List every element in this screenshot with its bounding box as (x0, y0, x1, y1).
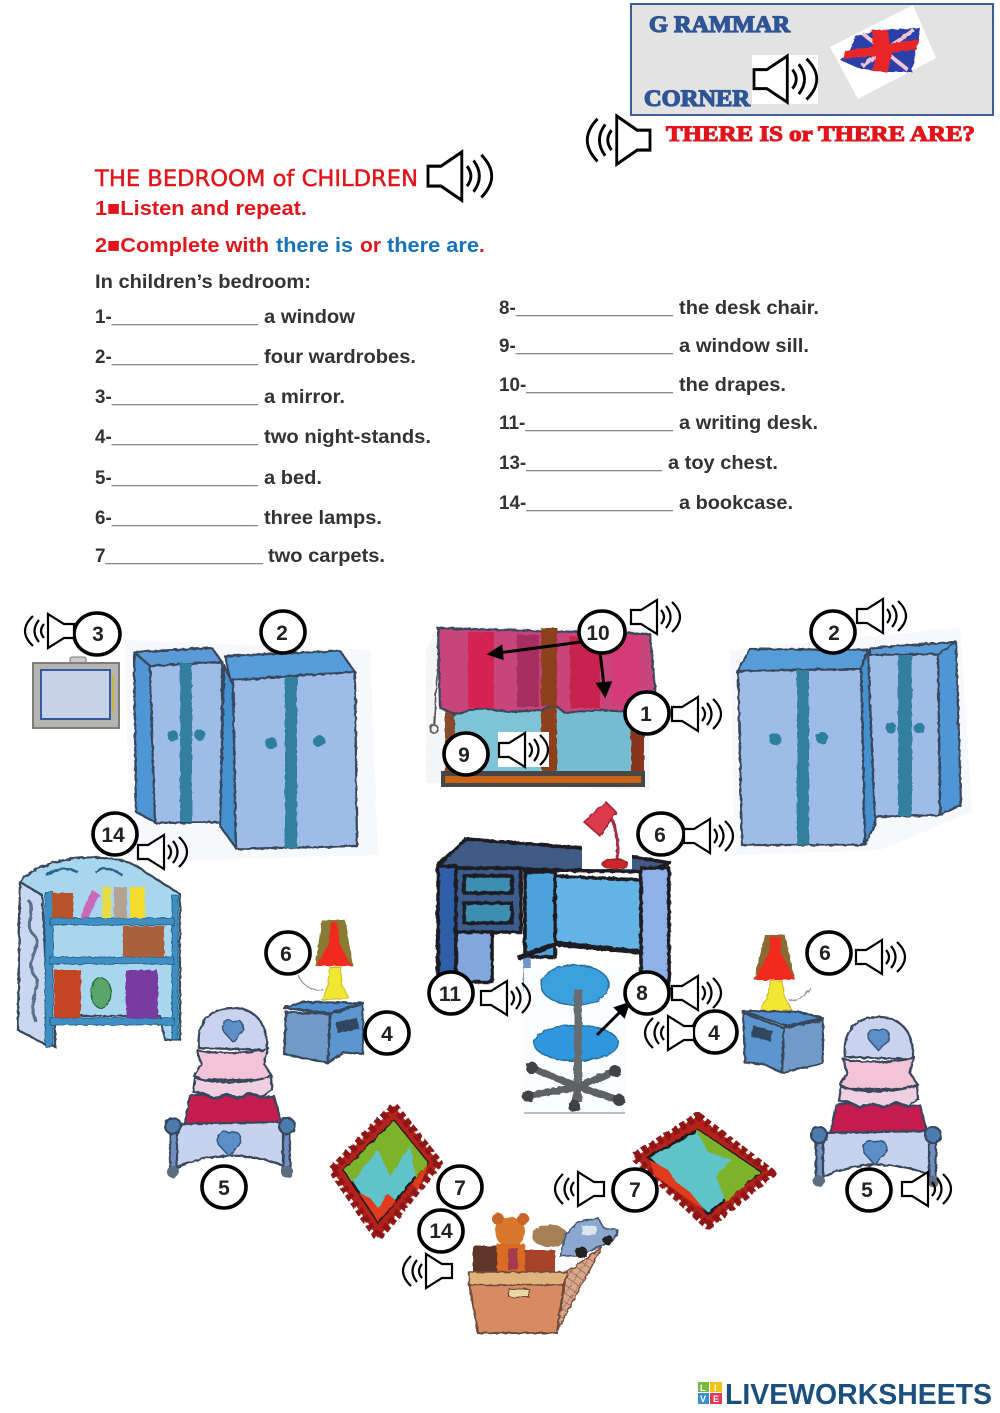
label 6 desk (638, 813, 684, 855)
instruction 2 (95, 234, 485, 257)
logo: liveworksheets: I (714, 1383, 717, 1393)
instruction 2: there is (276, 234, 353, 257)
toy chest (469, 1213, 618, 1333)
instruction 2: . (479, 234, 485, 257)
back panels (525, 872, 555, 957)
wardrobes: left pair (125, 640, 378, 862)
exercise: right column: 9-_______________ (499, 335, 674, 357)
logo: liveworksheets: E (713, 1394, 719, 1404)
exercise: right column: a toy chest. (668, 452, 778, 474)
large wardrobe (738, 649, 875, 845)
exercise: right column: the desk chair. (679, 297, 819, 319)
exercise: left column: 1-______________ (95, 306, 259, 328)
label 10 (579, 611, 625, 653)
wardrobes: right pair (730, 628, 972, 855)
label 14 bookcase: 14 (101, 824, 125, 847)
instruction 2: there are (387, 234, 479, 257)
label 8 (625, 972, 669, 1014)
books (52, 887, 164, 1018)
logo: liveworksheets: L (700, 1383, 706, 1393)
banner: grammar corner (631, 4, 993, 115)
label 2 right (811, 611, 855, 653)
exercise: left column: a window (264, 306, 356, 328)
pull cord (434, 660, 438, 724)
exercise: left column: a mirror. (264, 386, 345, 408)
speaker for 4 (645, 1016, 694, 1050)
right carpet (634, 1116, 772, 1226)
large wardrobe (220, 651, 357, 849)
exercise: left column (95, 306, 431, 567)
small wardrobe (134, 648, 222, 823)
exercise: right column: 13-_____________ (499, 452, 663, 474)
label 7 left (438, 1166, 482, 1208)
title: the bedroom of children: THE BEDROOM of CHILDREN (94, 167, 418, 192)
bookcase (18, 857, 180, 1047)
speaker for 7 (555, 1172, 604, 1206)
label 11 (429, 972, 473, 1014)
label 5 left (202, 1166, 246, 1208)
mirror (33, 657, 119, 728)
label 1 (625, 692, 669, 734)
window with drapes (426, 626, 656, 790)
left carpet (332, 1106, 439, 1238)
label 10: 10 (586, 622, 610, 645)
label 1: 1 (640, 703, 652, 726)
exercise: left column: 3-______________ (95, 386, 259, 408)
label 6 left: 6 (280, 943, 292, 966)
instruction 1: 1■Listen and repeat. (95, 197, 307, 220)
label 7 right: 7 (629, 1179, 641, 1202)
drapes (438, 628, 656, 714)
label 2 left: 2 (276, 622, 288, 645)
heading: there is or there are: THERE IS or THERE ARE? (666, 121, 975, 146)
chest front (469, 1283, 564, 1333)
instruction 2: or (360, 234, 381, 257)
exercise: left column: 6-______________ (95, 507, 259, 529)
banner text: CORNER: CORNER (644, 86, 750, 111)
speaker for 11 (481, 981, 530, 1015)
exercise: left column: four wardrobes. (264, 346, 416, 368)
right leg (641, 868, 669, 990)
logo: liveworksheets: LIVEWORKSHEETS (725, 1379, 992, 1411)
icon: british flag (830, 5, 936, 99)
arrow: chair (597, 1004, 628, 1035)
speaker for 2 (857, 599, 906, 633)
speaker for 3 (25, 614, 74, 648)
drawers (456, 868, 521, 932)
exercise: left column: 4-______________ (95, 426, 259, 448)
label 4 right: 4 (708, 1022, 720, 1045)
speaker for 8 (672, 976, 721, 1010)
label 5 right: 5 (861, 1179, 873, 1202)
icon: speaker beside title (428, 152, 492, 200)
writing desk (438, 839, 670, 990)
exercise subheading: In children’s bedroom: (95, 271, 311, 293)
label 9 (444, 733, 488, 775)
side panel (18, 882, 50, 1047)
label 5 left: 5 (218, 1177, 230, 1200)
speaker for 10 (631, 600, 680, 634)
exercise: left column: two night-stands. (264, 426, 431, 448)
label 2 left (261, 611, 305, 653)
label 9: 9 (458, 744, 470, 767)
label 8: 8 (636, 982, 648, 1005)
speaker for desk 6 (684, 819, 733, 853)
speaker for 5 right (902, 1172, 951, 1206)
exercise: right column (499, 297, 819, 514)
exercise: right column: 10-______________ (499, 374, 674, 396)
desk chair (522, 965, 626, 1113)
exercise: right column: the drapes. (679, 374, 786, 396)
label 4 right (693, 1011, 737, 1053)
label 4 left (365, 1012, 409, 1054)
label 11: 11 (439, 983, 461, 1006)
speaker for 14 bookcase (138, 835, 187, 869)
label 3 (74, 613, 120, 655)
left leg (438, 866, 456, 984)
speaker for 6 right (856, 940, 905, 974)
exercise: right column: 11-______________ (499, 412, 674, 434)
speaker for toy chest (403, 1254, 452, 1288)
instruction 2: 2■Complete with (95, 234, 269, 257)
banner text: G RAMMAR: G RAMMAR (649, 12, 790, 37)
exercise: right column: a bookcase. (679, 492, 793, 514)
window sill (441, 771, 645, 787)
label 3: 3 (92, 623, 104, 646)
exercise: right column: a window sill. (679, 335, 809, 357)
label 6 desk: 6 (654, 824, 666, 847)
label 14 bookcase (93, 813, 137, 855)
left night-stand (284, 1002, 363, 1063)
speaker for 1 (672, 697, 721, 731)
toy car (560, 1218, 618, 1258)
speaker for 9 (498, 732, 549, 767)
label 7 left: 7 (454, 1177, 466, 1200)
label 2 right: 2 (828, 622, 840, 645)
icon: speaker beside question (587, 116, 650, 164)
arrows: drapes (490, 642, 610, 695)
toys (473, 1213, 568, 1272)
exercise: right column: 14-______________ (499, 492, 674, 514)
right bed (811, 1017, 941, 1187)
desk lamp (582, 798, 632, 869)
scroll top (46, 869, 122, 875)
shelves (45, 892, 178, 1047)
label 6 right (807, 932, 851, 974)
label 14 toy chest: 14 (429, 1220, 453, 1243)
left bed (165, 1008, 295, 1178)
exercise: left column: 5-______________ (95, 467, 259, 489)
label 6 right: 6 (819, 942, 831, 965)
exercise: left column: two carpets. (268, 545, 385, 567)
window panes (445, 628, 644, 773)
left lamp (298, 920, 353, 1000)
exercise: left column: a bed. (264, 467, 322, 489)
label 4 left: 4 (381, 1023, 393, 1046)
logo: liveworksheets: V (700, 1394, 706, 1404)
exercise: right column: 8-_______________ (499, 297, 674, 319)
label 6 left (266, 932, 310, 974)
wicker side (556, 1247, 602, 1333)
exercise: left column: three lamps. (264, 507, 382, 529)
exercise: left column: 2-______________ (95, 346, 259, 368)
label 7 right (613, 1169, 657, 1211)
right lamp (754, 935, 811, 1011)
label 5 right (847, 1169, 891, 1211)
icon: speaker on white patch (752, 55, 818, 104)
exercise: left column: 7_______________ (95, 545, 264, 567)
small wardrobe (866, 642, 961, 817)
label 14 toy chest (419, 1210, 463, 1252)
exercise: right column: a writing desk. (679, 412, 818, 434)
right night-stand (743, 1011, 823, 1073)
